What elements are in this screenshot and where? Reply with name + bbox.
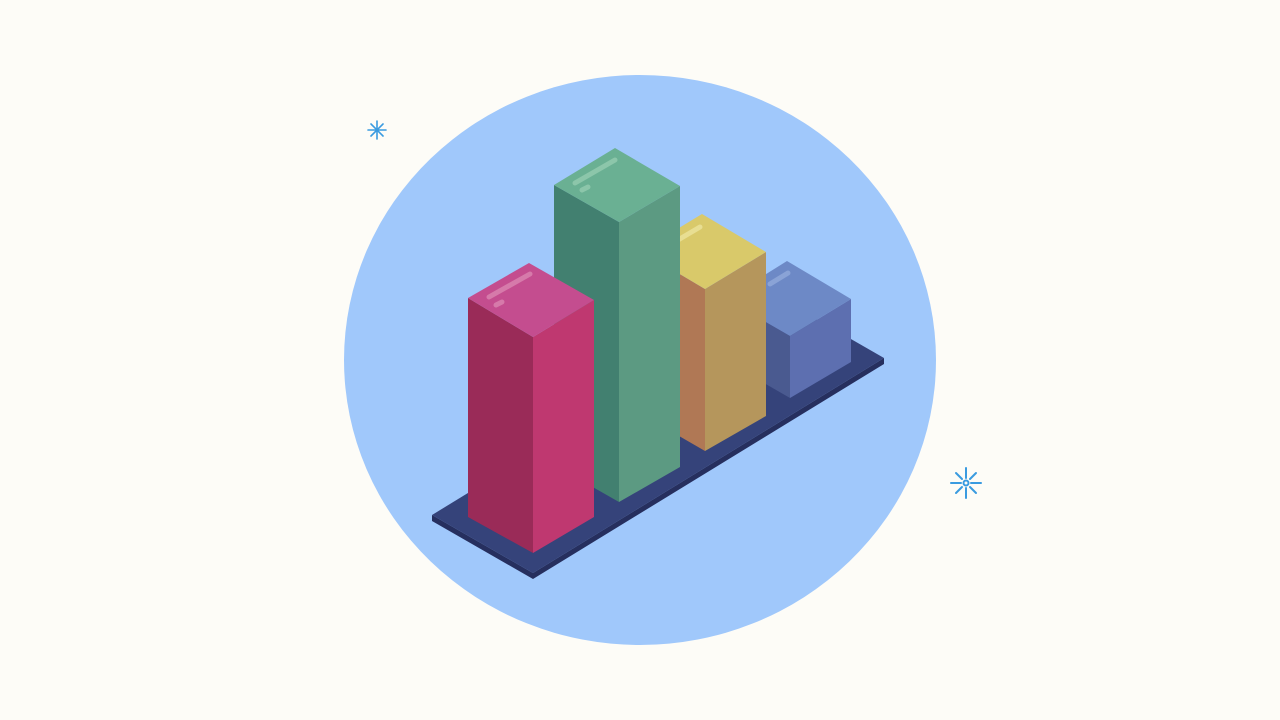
- bar: green: [554, 148, 680, 502]
- base plate: [432, 300, 884, 579]
- icon: sparkle small: [368, 121, 386, 139]
- bar: blue: [726, 261, 851, 398]
- background circle: [344, 75, 936, 645]
- icon: sparkle large: [951, 468, 981, 498]
- bar: pink: [468, 263, 594, 553]
- bar: yellow: [641, 214, 766, 451]
